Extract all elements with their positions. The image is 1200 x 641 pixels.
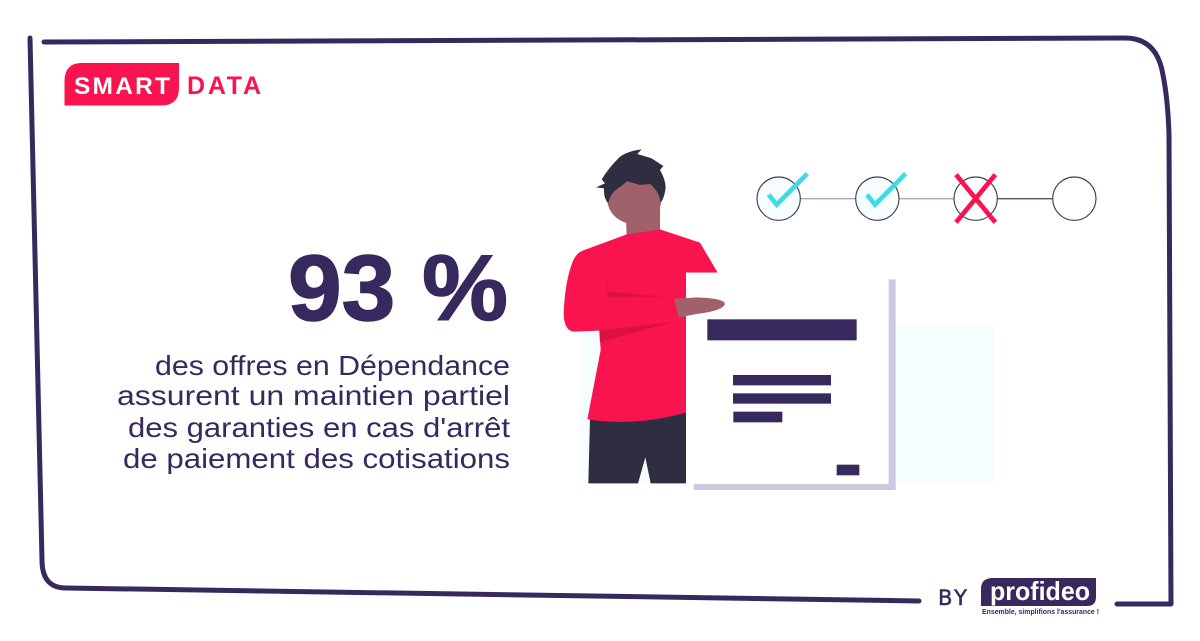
description text: des garanties en cas d'arrêt (128, 412, 510, 443)
hair (596, 149, 666, 203)
progress steps (757, 174, 1096, 222)
document sheet (686, 273, 889, 484)
illustration (564, 149, 1096, 490)
logo: smart data: SMART (74, 73, 170, 100)
document title bar (707, 319, 857, 340)
by label: BY (938, 586, 967, 610)
document lines (733, 375, 831, 385)
trousers (588, 410, 686, 483)
description text (117, 350, 510, 474)
description text: des offres en Dépendance (155, 350, 510, 381)
step circles (757, 177, 800, 220)
logo: profideo: profideo (990, 576, 1090, 606)
head (607, 175, 661, 224)
document shadow (694, 279, 896, 490)
shirt fold: arm bottom (599, 322, 674, 342)
check marks (769, 174, 807, 205)
person (564, 149, 718, 483)
big number: 93 % (288, 236, 508, 340)
description text: assurent un maintien partiel (117, 380, 510, 411)
description text: de paiement des cotisations (123, 443, 510, 474)
logo: smart data (64, 63, 261, 106)
logo: profideo: Ensemble, simplifions l'assurance ! (982, 607, 1099, 616)
cross mark (956, 175, 995, 222)
hand (674, 297, 725, 317)
document (686, 273, 896, 490)
logo: smart data: DATA (187, 72, 261, 100)
connectors (800, 197, 954, 201)
pale background panel (581, 325, 994, 483)
shirt fold: arm top (607, 279, 663, 297)
document stamp (837, 465, 859, 475)
logo: profideo (981, 576, 1099, 616)
neck (626, 207, 660, 238)
shirt (564, 229, 718, 422)
